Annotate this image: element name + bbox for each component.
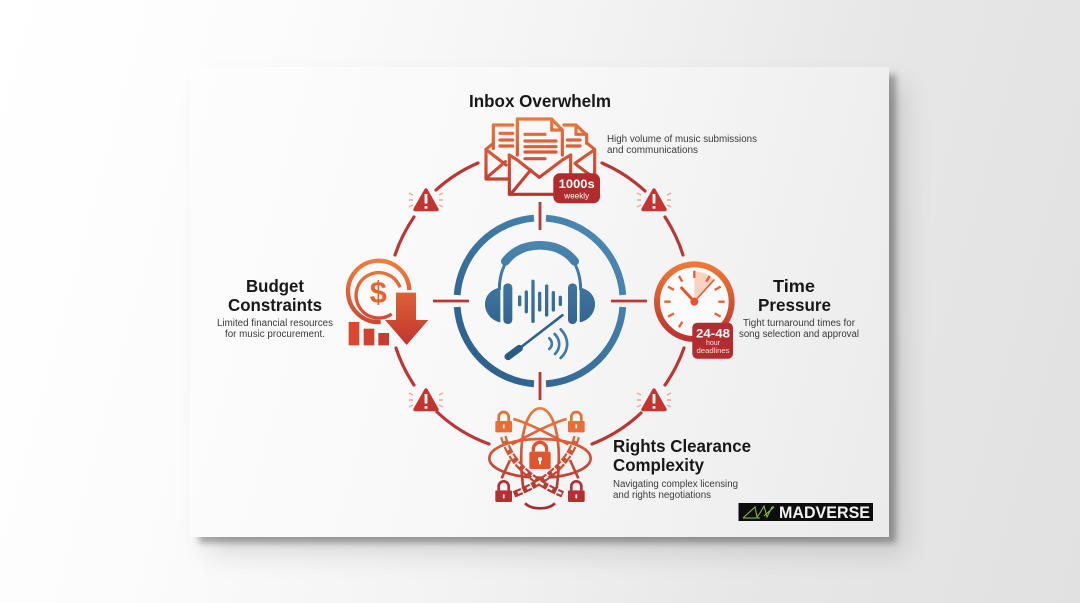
badge: 1000s weekly: [553, 173, 600, 203]
red segmented ring: [395, 163, 684, 444]
heading: Budget Constraints: [228, 276, 322, 315]
badge: 1000s weekly: 1000s: [559, 177, 595, 191]
logo: Madverse: [738, 503, 873, 522]
heading: Budget Constraints: Constraints: [228, 295, 322, 315]
icon: warning top right: [637, 190, 671, 210]
heading: Time Pressure: Time: [773, 276, 815, 296]
badge: 24-48 hour deadlines: 24-48: [696, 326, 730, 340]
heading: Time Pressure: [758, 276, 831, 315]
heading: Inbox Overwhelm: Inbox Overwhelm: [469, 91, 611, 111]
text: time pressure description: Tight turnaround times for: [743, 318, 856, 329]
text: inbox description: and communications: [607, 145, 698, 156]
badge: 24-48 hour deadlines: hour: [706, 340, 721, 347]
text: time pressure description: song selection and approval: [739, 329, 859, 340]
heading: Budget Constraints: Budget: [246, 276, 304, 296]
icon: warning bottom left: [409, 390, 443, 410]
icon: rights atom with chains and locks: [489, 408, 591, 508]
icon: inbox envelopes and documents: [486, 119, 595, 194]
text: budget description: for music procurement.: [225, 329, 325, 340]
badge: 24-48 hour deadlines: [692, 323, 733, 359]
icon: warning bottom right: [637, 390, 671, 410]
icon: budget coin and down arrow: [348, 261, 428, 345]
text: inbox description: High volume of music submissions: [607, 134, 757, 145]
text: time pressure description: [739, 318, 859, 340]
text: budget description: [217, 318, 333, 340]
text: rights description: Navigating complex licensing: [613, 479, 738, 490]
icon: warning top left: [409, 190, 443, 210]
text: inbox description: [607, 134, 757, 156]
text: budget description: Limited financial resources: [217, 318, 333, 329]
badge: 1000s weekly: weekly: [563, 192, 590, 200]
heading: Rights Clearance Complexity: Rights Clearance: [613, 436, 751, 456]
badge: 24-48 hour deadlines: deadlines: [696, 348, 730, 355]
heading: Rights Clearance Complexity: [613, 436, 751, 475]
heading: Rights Clearance Complexity: Complexity: [613, 455, 704, 475]
blue centre ring: [457, 218, 623, 384]
text: rights description: [613, 479, 738, 501]
panel: white card: [190, 67, 889, 537]
icon: budget coin and down arrow: $: [370, 276, 387, 310]
icon: clock: [657, 264, 732, 339]
logo: Madverse: MADVERSE: [779, 503, 870, 522]
heading: Time Pressure: Pressure: [758, 295, 831, 315]
icon: headphones with waveform and mic: [485, 244, 595, 358]
text: rights description: and rights negotiations: [613, 490, 711, 501]
